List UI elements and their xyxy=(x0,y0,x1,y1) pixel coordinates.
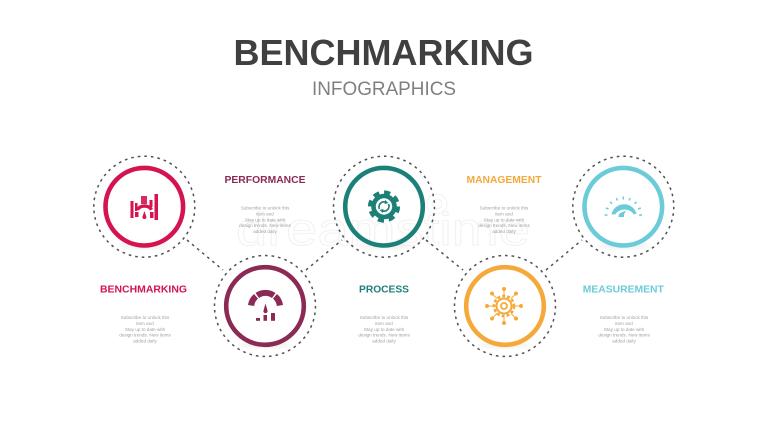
text block: management: Subscribe to unlock this xyxy=(480,206,529,210)
icon: gauge with bars xyxy=(130,194,158,220)
text block: benchmarking: Stay up to date with xyxy=(125,327,166,332)
text block: performance: Stay up to date with xyxy=(245,217,286,222)
text block: measurement: Subscribe to unlock this xyxy=(600,315,649,320)
text block: process: Subscribe to unlock this xyxy=(360,315,409,320)
watermark: dreamstime xyxy=(236,203,530,255)
label: measurement xyxy=(583,284,664,344)
text block: benchmarking: added daily xyxy=(133,339,157,344)
text block: performance: added daily xyxy=(253,229,277,234)
text block: management: item and xyxy=(495,211,513,216)
text block: management: design trends. New items xyxy=(478,223,530,228)
text block: benchmarking: design trends. New items xyxy=(119,333,171,338)
text block: process: item and xyxy=(375,321,393,326)
text block: measurement: item and xyxy=(615,321,633,326)
text block: process: design trends. New items xyxy=(358,333,410,338)
subtitle: INFOGRAPHICS xyxy=(312,79,456,100)
label: benchmarking: BENCHMARKING xyxy=(100,284,187,296)
label: process: PROCESS xyxy=(359,284,409,296)
text block: management: Stay up to date with xyxy=(484,217,525,222)
label: measurement: MEASUREMENT xyxy=(583,284,664,296)
label: performance xyxy=(224,174,306,234)
watermark xyxy=(236,194,530,255)
title: BENCHMARKING xyxy=(234,32,534,73)
panel: measurement circle xyxy=(573,156,674,257)
icon: gauge dial xyxy=(604,196,642,217)
label: management xyxy=(466,174,542,234)
label: benchmarking xyxy=(100,284,187,344)
label: performance: PERFORMANCE xyxy=(224,174,306,186)
text block: benchmarking: Subscribe to unlock this xyxy=(121,315,170,320)
label: management: MANAGEMENT xyxy=(466,174,542,186)
panel: performance circle xyxy=(214,256,316,356)
text block: management: added daily xyxy=(492,229,516,234)
panel: management circle xyxy=(454,256,556,356)
icon: gear with refresh arrows xyxy=(370,192,398,221)
label: process xyxy=(358,284,410,344)
text block: measurement: Stay up to date with xyxy=(604,327,645,332)
text block: measurement: design trends. New items xyxy=(598,333,650,338)
text block: performance: design trends. New items xyxy=(239,223,291,228)
text block: performance: item and xyxy=(256,211,274,216)
icon: gear with radiating nodes xyxy=(485,287,523,325)
panel: benchmarking circle xyxy=(94,156,195,257)
text block: measurement: added daily xyxy=(612,339,636,344)
text block: performance: Subscribe to unlock this xyxy=(241,206,290,210)
dashed connectors xyxy=(187,240,582,270)
panel: process circle xyxy=(334,156,434,257)
icon: speedometer with bars xyxy=(248,290,283,321)
text block: process: Stay up to date with xyxy=(364,327,405,332)
text block: process: added daily xyxy=(372,339,396,344)
text block: benchmarking: item and xyxy=(136,321,154,326)
